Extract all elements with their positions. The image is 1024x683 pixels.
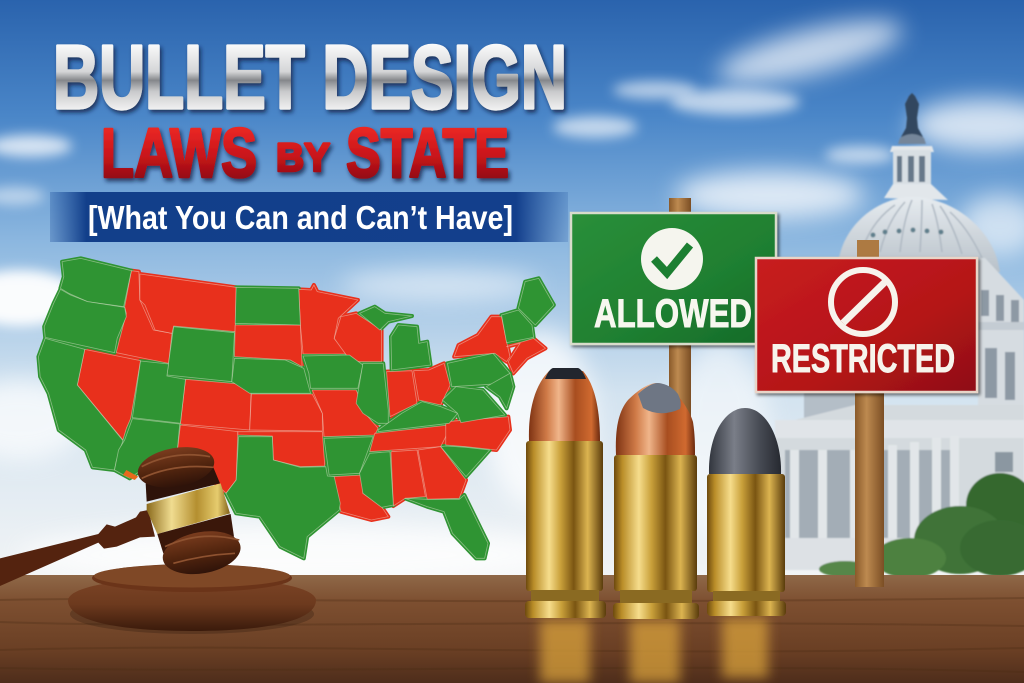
capitol statue and lantern	[884, 93, 948, 200]
gavel	[0, 442, 316, 634]
bullet: jacketed pointed	[525, 368, 606, 618]
table wood grain	[0, 598, 1024, 672]
states: allowed (green)	[38, 258, 554, 558]
gavel handle and head	[0, 442, 244, 586]
map backing to close gaps between states	[38, 258, 554, 558]
allowed label: ALLOWED	[594, 292, 752, 336]
gold band	[147, 483, 230, 534]
subtitle banner	[50, 192, 568, 242]
restricted label: RESTRICTED	[771, 337, 955, 381]
US map	[38, 258, 554, 558]
capitol colonnade	[775, 392, 1024, 570]
title line 2: STATE	[346, 114, 509, 192]
title	[53, 28, 567, 192]
states: restricted (red)	[77, 271, 545, 520]
allowed sign post	[669, 198, 691, 423]
title line 1: BULLET DESIGN	[53, 28, 567, 128]
capitol dome	[838, 197, 1024, 410]
subtitle text: [What You Can and Can’t Have]	[88, 199, 513, 236]
bullet: hollow point	[613, 383, 699, 619]
check icon	[641, 228, 703, 290]
restricted sign post	[855, 240, 884, 587]
capitol building	[775, 93, 1024, 578]
reflections under bullets	[540, 618, 768, 683]
gavel sound block	[68, 564, 316, 634]
gavel handle	[0, 510, 155, 586]
trees	[819, 473, 1024, 578]
title line 2	[101, 114, 509, 192]
title line 2: BY	[276, 136, 330, 180]
restricted sign	[756, 258, 977, 392]
gavel bottom cap	[157, 514, 244, 580]
state: orange corner	[123, 470, 138, 480]
bullet: lead round nose	[707, 408, 786, 616]
gavel top cap	[135, 442, 220, 502]
allowed sign	[571, 213, 776, 344]
prohibited icon	[831, 270, 895, 334]
title line 2: LAWS	[101, 114, 257, 192]
table	[0, 575, 1024, 683]
